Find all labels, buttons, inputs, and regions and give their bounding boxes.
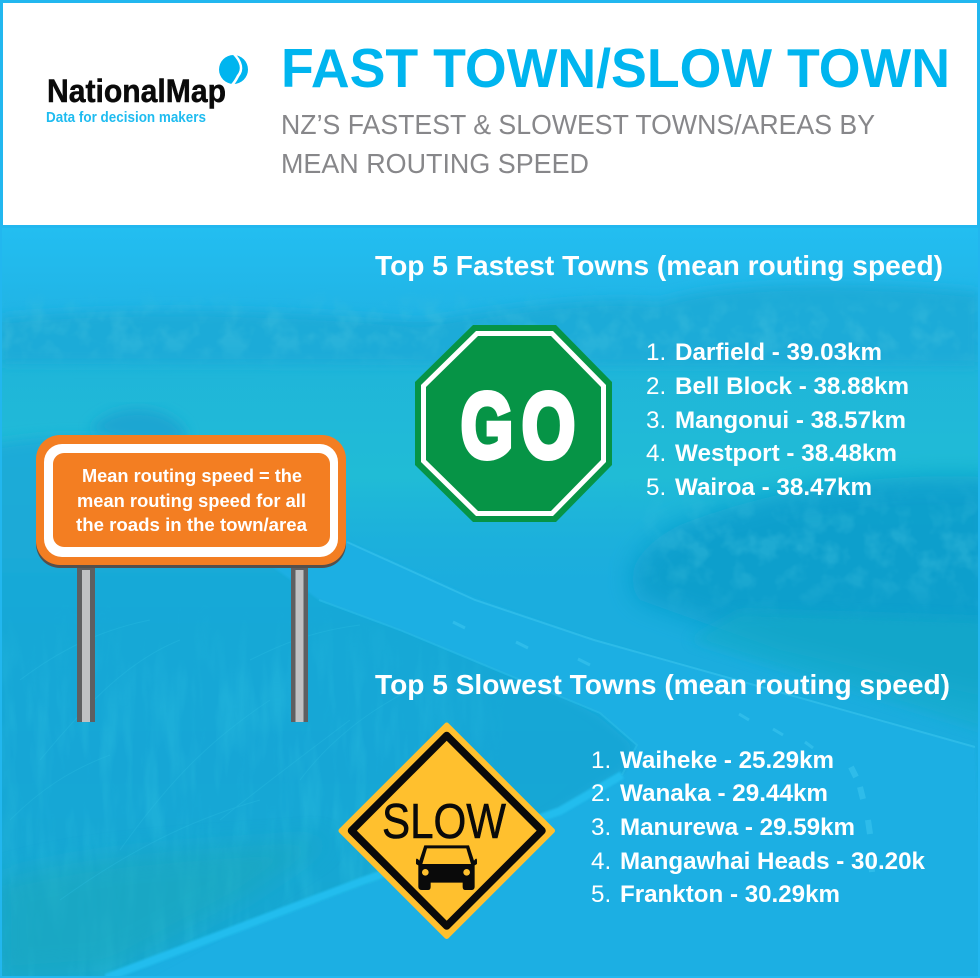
item 2: Wanaka - 29.44km — [620, 780, 828, 807]
background: blue-tinted road landscape — [0, 227, 980, 978]
item 1: Darfield - 39.03km — [675, 339, 882, 366]
item 3: Manurewa - 29.59km — [620, 814, 855, 841]
icon: globe mark — [219, 53, 248, 85]
subtitle — [281, 109, 875, 179]
item 5: 5. — [646, 474, 666, 501]
item 2: 2. — [646, 373, 666, 400]
page border — [1, 227, 979, 977]
sign text — [76, 466, 308, 535]
item 1: Waiheke - 25.29km — [620, 747, 834, 774]
logo: NationalMap — [46, 53, 248, 126]
item 4: 4. — [646, 440, 666, 467]
item 2: 2. — [591, 780, 611, 807]
subtitle: MEAN ROUTING SPEED — [281, 148, 589, 179]
icon: yellow SLOW diamond sign — [341, 725, 552, 936]
icon: car — [416, 845, 477, 890]
heading: fastest towns: Top 5 Fastest Towns (mean routing speed) — [375, 250, 943, 281]
item 1: 1. — [591, 747, 611, 774]
sign text: the roads in the town/area — [76, 515, 308, 535]
sign posts — [77, 562, 308, 722]
sign text: mean routing speed for all — [77, 491, 306, 511]
sign text: Mean routing speed = the — [82, 466, 302, 486]
item 5: Frankton - 30.29km — [620, 881, 840, 908]
item 4: Mangawhai Heads - 30.20k — [620, 848, 926, 875]
logo: NationalMap: Data for decision makers — [46, 110, 206, 126]
item 5: Wairoa - 38.47km — [675, 474, 872, 501]
list: fastest towns — [646, 339, 909, 501]
subtitle: NZ’S FASTEST & SLOWEST TOWNS/AREAS BY — [281, 109, 875, 140]
item 3: Mangonui - 38.57km — [675, 407, 906, 434]
item 4: Westport - 38.48km — [675, 440, 897, 467]
header panel — [2, 2, 978, 226]
sign board — [36, 435, 346, 568]
list: slowest towns — [591, 747, 926, 908]
icon: green GO octagon sign — [415, 325, 612, 522]
icon: green GO octagon sign: O — [522, 375, 575, 477]
item 3: 3. — [646, 407, 666, 434]
item 3: 3. — [591, 814, 611, 841]
icon: yellow SLOW diamond sign: SLOW — [382, 795, 507, 849]
item 1: 1. — [646, 339, 666, 366]
title: FAST TOWN/SLOW TOWN — [281, 37, 950, 99]
logo: NationalMap: NationalMap — [47, 73, 226, 109]
item 2: Bell Block - 38.88km — [675, 373, 909, 400]
item 4: 4. — [591, 848, 611, 875]
icon: green GO octagon sign: G — [461, 375, 513, 477]
orange definition road sign — [36, 435, 346, 722]
heading: slowest towns: Top 5 Slowest Towns (mean routing speed) — [375, 669, 950, 700]
road surface — [106, 540, 980, 978]
item 5: 5. — [591, 881, 611, 908]
